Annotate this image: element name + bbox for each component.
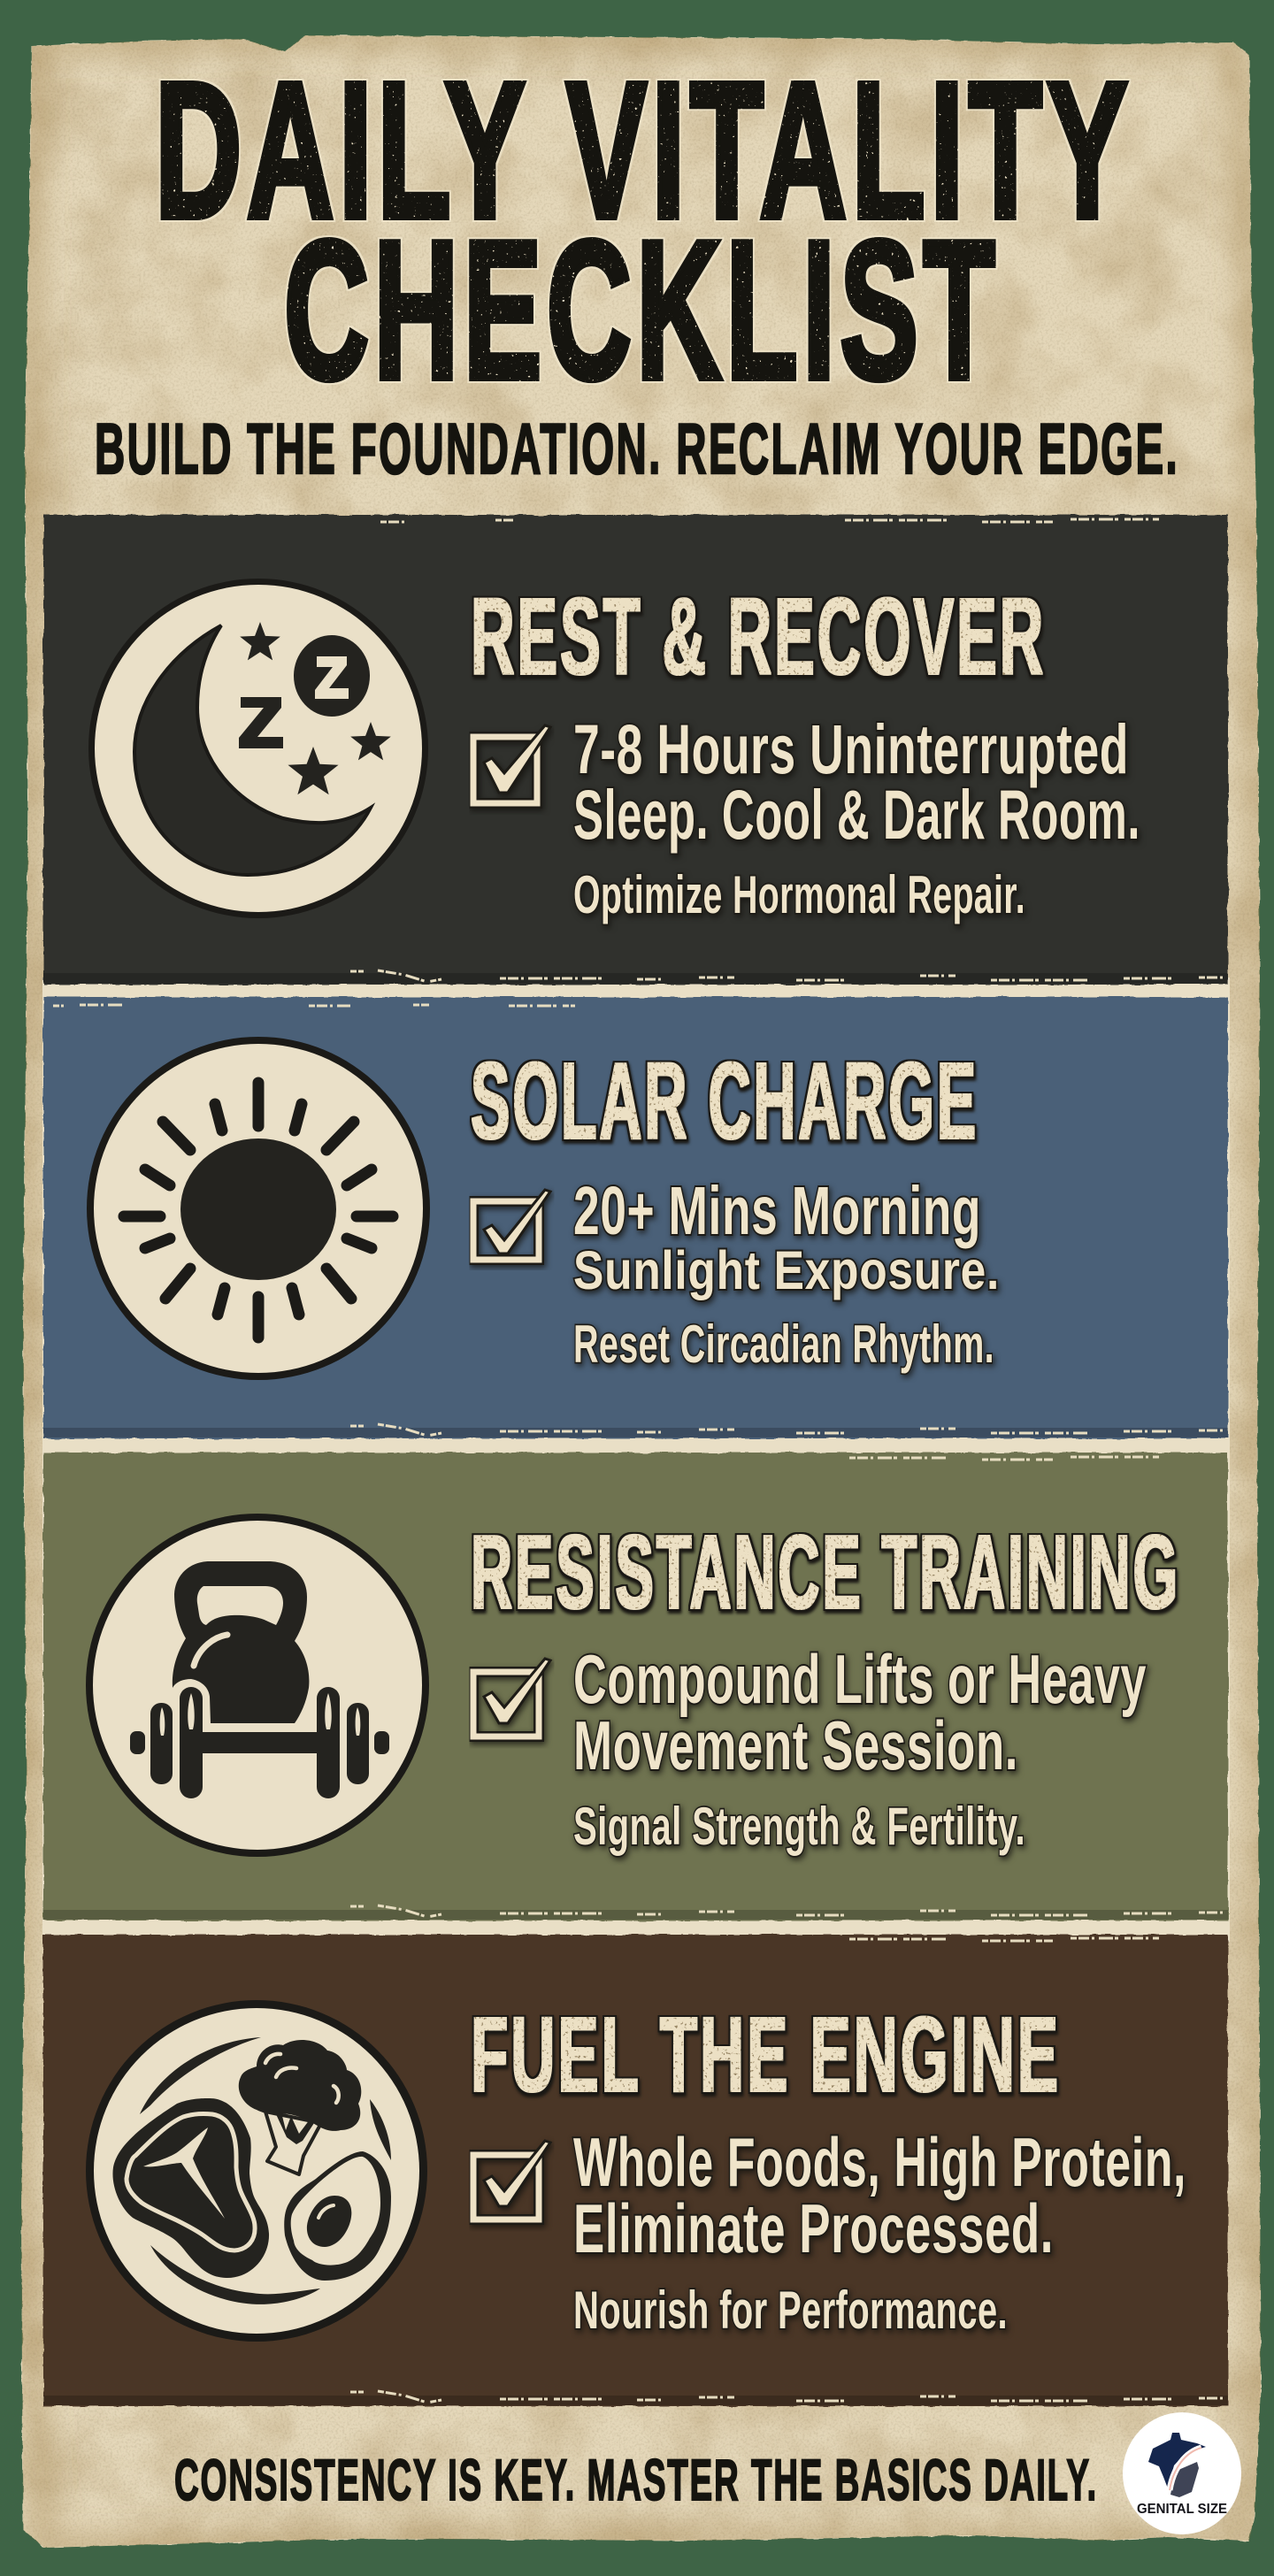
- panel: fuel the engine: [43, 1935, 1228, 2406]
- checkbox: [473, 1659, 550, 1736]
- icon: kettlebell and dumbbell: [86, 1514, 429, 1857]
- checklist item: Movement Session.: [573, 1706, 1018, 1784]
- benefit note: Nourish for Performance.: [573, 2281, 1008, 2340]
- panel: solar charge: [43, 997, 1228, 1438]
- icon: steak, broccoli and avocado plate: [86, 2000, 427, 2342]
- checklist item: Sunlight Exposure.: [573, 1240, 1000, 1300]
- icon: moon with stars: [88, 579, 428, 918]
- panel: rest and recover: [43, 515, 1228, 985]
- benefit note: Reset Circadian Rhythm.: [573, 1315, 994, 1374]
- panel: resistance training: [43, 1453, 1228, 1920]
- icon: sun: [87, 1037, 430, 1380]
- benefit note: Optimize Hormonal Repair.: [573, 865, 1025, 924]
- checklist item: Eliminate Processed.: [573, 2189, 1054, 2267]
- logo badge: genital size: GENITAL SIZE: [1137, 2502, 1227, 2517]
- title: [155, 43, 1132, 420]
- checkbox: [473, 725, 550, 803]
- checklist item: [573, 1640, 1147, 1784]
- benefit note: Signal Strength & Fertility.: [573, 1797, 1025, 1856]
- checklist item: 20+ Mins Morning: [573, 1173, 981, 1249]
- checklist item: [573, 709, 1140, 854]
- logo badge: genital size: [1123, 2412, 1241, 2534]
- checklist item: [573, 1173, 1000, 1300]
- checklist item: [573, 2123, 1186, 2267]
- checkbox: [473, 1190, 550, 1260]
- checkbox: [473, 2141, 550, 2220]
